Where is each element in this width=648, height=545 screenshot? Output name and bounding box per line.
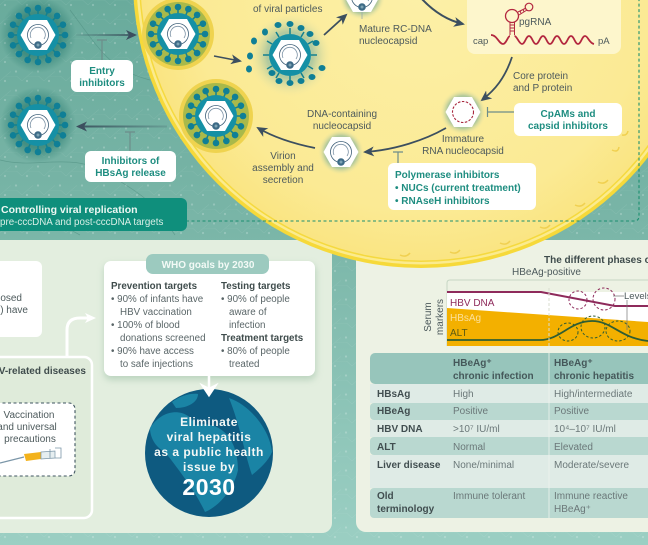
label: virion assembly and secretion — [252, 151, 314, 186]
panel: WHO goals by 2030: Prevention targets — [111, 281, 198, 292]
callout: inhibitors of HBsAg release: HBsAg release — [95, 168, 166, 179]
label: DNA-containing nucleocapsid: DNA-containing — [307, 109, 377, 120]
panel: pgRNA — [467, 0, 621, 54]
callout: CpAMs and capsid inhibitors: capsid inhibitors — [528, 121, 608, 132]
arrow: to mature nucleocapsid — [324, 15, 346, 35]
callout: entry inhibitors: inhibitors — [79, 78, 125, 89]
label: virion assembly and secretion: Virion — [270, 151, 296, 162]
callout: CpAMs and capsid inhibitors — [514, 103, 622, 136]
callout: polymerase inhibitors — [388, 163, 536, 210]
arrow: immature to DNA-containing — [365, 128, 446, 152]
text box: diagnosis fragment — [0, 261, 42, 337]
panel: WHO goals by 2030: infection — [229, 320, 266, 331]
panel: HBV-related diseases: V-related diseases — [0, 366, 86, 377]
chart: serum markers: ALT — [450, 328, 468, 339]
label: core protein and P protein: and P protein — [513, 83, 572, 94]
globe: eliminate viral hepatitis: 2030 — [182, 474, 236, 500]
mature RC-DNA nucleocapsid — [339, 0, 385, 20]
label: immature RNA nucleocapsid: Immature — [442, 134, 485, 145]
label: immature RNA nucleocapsid: RNA nucleocapsid — [422, 146, 504, 157]
callout: polymerase inhibitors: Polymerase inhibitors — [395, 170, 500, 181]
table: phases of chronic infection: HBeAg⁺ — [554, 358, 593, 369]
table: phases of chronic infection: HBeAg⁺ — [554, 504, 591, 515]
text box: diagnosis fragment: osed — [0, 293, 22, 304]
globe: eliminate viral hepatitis — [145, 389, 273, 517]
panel: WHO goals by 2030: • 90% have access — [111, 346, 194, 357]
label: core protein and P protein: Core protein — [513, 71, 568, 82]
panel: HBV-related diseases — [0, 357, 92, 518]
virus: inside cell after entry — [142, 0, 214, 70]
axis label: serum markers — [423, 299, 446, 335]
panel: WHO goals by 2030 — [104, 254, 316, 380]
table: phases of chronic infection: Immune tolerant — [453, 491, 525, 502]
chart: serum markers: HBsAg — [450, 313, 481, 324]
table: phases of chronic infection: terminology — [377, 504, 435, 515]
table: phases of chronic infection: Normal — [453, 442, 485, 453]
immature RNA nucleocapsid — [440, 89, 486, 135]
panel: prevention and WHO goals — [0, 240, 332, 533]
panel: WHO goals by 2030: to safe injections — [120, 359, 193, 370]
panel: WHO goals by 2030: Treatment targets — [221, 333, 304, 344]
heading: controlling viral replication: pre-cccDNA and post-cccDNA targets — [0, 217, 163, 228]
infected hepatocyte cell — [133, 0, 648, 268]
table: phases of chronic infection: HBeAg⁺ — [453, 358, 492, 369]
chart: serum markers: HBV DNA — [450, 298, 495, 309]
label: virion assembly and secretion: assembly and — [252, 163, 314, 174]
dashed boundary: viral replication targets — [186, 0, 639, 221]
table: phases of chronic infection: HBV DNA — [377, 424, 423, 435]
arrow: release — [78, 126, 167, 128]
globe: eliminate viral hepatitis: issue by — [183, 460, 235, 474]
callout: vaccination and universal precautions — [0, 403, 75, 476]
panel: WHO goals by 2030: aware of — [229, 307, 267, 318]
inhibitor bar: capsid — [488, 107, 514, 117]
callout: vaccination and universal precautions: precautions — [4, 434, 56, 445]
label: DNA-containing nucleocapsid: nucleocapsid — [313, 121, 371, 132]
label: mature RC-DNA nucleocapsid: nucleocapsid — [359, 36, 417, 47]
panel: WHO goals by 2030: donations screened — [120, 333, 206, 344]
inhibitor bar: entry — [97, 40, 107, 60]
globe: eliminate viral hepatitis: Eliminate — [180, 415, 238, 429]
panel: WHO goals by 2030: • 80% of people — [221, 346, 290, 357]
label: DNA-containing nucleocapsid — [307, 109, 377, 132]
virus with subviral particles — [246, 13, 332, 97]
table: phases of chronic infection: High/intermediate — [554, 389, 633, 400]
callout: inhibitors of HBsAg release — [85, 151, 176, 182]
text box: diagnosis fragment: ) have — [0, 305, 28, 316]
label: mature RC-DNA nucleocapsid — [359, 24, 432, 47]
table: phases of chronic infection: Positive — [554, 406, 589, 417]
inhibitor bar: polymerase — [393, 152, 403, 163]
table: phases of chronic infection: Liver disease — [377, 460, 441, 471]
virus: released — [0, 87, 76, 163]
table: phases of chronic infection: Positive — [453, 406, 488, 417]
panel: WHO goals by 2030: WHO goals by 2030 — [162, 260, 255, 271]
arrow: WHO goals to globe — [203, 376, 215, 395]
label: of viral particles: of viral particles — [253, 4, 322, 15]
virus: secreted virion in cell — [179, 79, 253, 153]
axis label: serum markers: markers — [435, 299, 446, 335]
heading: controlling viral replication — [0, 198, 187, 231]
heading: controlling viral replication: Controlling viral replication — [1, 204, 138, 216]
table: phases of chronic infection: High — [453, 389, 474, 400]
table: phases of chronic infection: >10⁷ IU/ml — [453, 424, 500, 435]
callout: polymerase inhibitors: • NUCs (current treatment) — [395, 183, 521, 194]
label: HBeAg-positive: HBeAg-positive — [512, 267, 581, 278]
arrow: entry — [76, 34, 135, 36]
label: core protein and P protein — [513, 71, 572, 94]
callout: CpAMs and capsid inhibitors: CpAMs and — [540, 109, 596, 120]
table: phases of chronic infection: HBsAg — [377, 389, 410, 400]
table: phases of chronic infection: Moderate/severe — [554, 460, 629, 471]
arrow: pgRNA to capsid — [482, 57, 512, 100]
label: immature RNA nucleocapsid — [422, 134, 504, 157]
callout: entry inhibitors: Entry — [89, 66, 115, 77]
arrow: to virion — [258, 128, 315, 148]
table: phases of chronic infection: HBeAg — [377, 406, 410, 417]
panel: WHO goals by 2030: • 90% of people — [221, 294, 290, 305]
callout: entry inhibitors — [71, 60, 133, 92]
table: phases of chronic infection: None/minimal — [453, 460, 514, 471]
globe: eliminate viral hepatitis: viral hepatitis — [167, 430, 251, 444]
inhibitor bar: HBsAg release — [125, 132, 135, 151]
callout: vaccination and universal precautions: Vaccination — [4, 410, 54, 421]
panel: WHO goals by 2030: Testing targets — [221, 281, 291, 292]
label: mature RC-DNA nucleocapsid: Mature RC-DNA — [359, 24, 432, 35]
panel: WHO goals by 2030: • 90% of infants have — [111, 294, 204, 305]
axis label: serum markers: Serum — [423, 302, 434, 332]
panel: WHO goals by 2030: HBV vaccination — [120, 307, 192, 318]
globe: eliminate viral hepatitis: as a public health — [154, 445, 264, 459]
arrowhead: to WHO goals — [85, 313, 96, 323]
label: virion assembly and secretion: secretion — [263, 175, 303, 186]
arrow: to WHO goals — [67, 318, 92, 357]
panel: pgRNA: pgRNA — [519, 17, 552, 28]
table: phases of chronic infection: 10⁴–10⁷ IU/ml — [554, 424, 616, 435]
panel: phases — [356, 240, 648, 532]
callout: inhibitors of HBsAg release: Inhibitors of — [102, 156, 160, 167]
virus: extracellular, entering — [0, 0, 76, 73]
table: phases of chronic infection: Immune reactive — [554, 491, 628, 502]
arrow: to viral particle assembly — [214, 56, 240, 61]
table: phases of chronic infection: ALT — [377, 442, 396, 453]
panel: pgRNA: cap — [473, 36, 488, 47]
DNA-containing nucleocapsid — [318, 129, 364, 175]
chart: serum markers — [447, 280, 648, 346]
table: phases of chronic infection: Old — [377, 491, 394, 502]
table: phases of chronic infection: chronic hepatitis — [554, 371, 634, 382]
arrow: to pgRNA — [421, 0, 463, 24]
callout: polymerase inhibitors: • RNAseH inhibitors — [395, 196, 490, 207]
table: phases of chronic infection: Elevated — [554, 442, 593, 453]
panel: pgRNA: pA — [598, 36, 610, 47]
table: phases of chronic infection: chronic infection — [453, 371, 534, 382]
panel: WHO goals by 2030: treated — [229, 359, 260, 370]
panel: WHO goals by 2030: • 100% of blood — [111, 320, 180, 331]
table: phases of chronic infection — [370, 353, 648, 518]
